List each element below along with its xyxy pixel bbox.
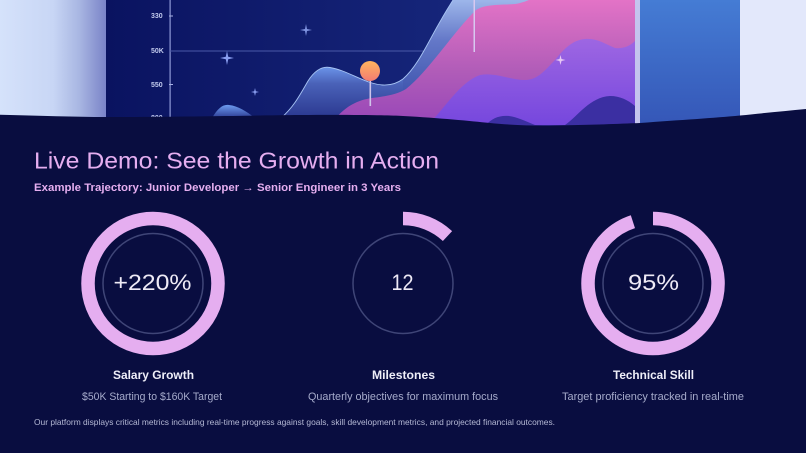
vertical marker line — [474, 0, 475, 52]
description: milestones: Quarterly objectives for maximum focus — [308, 391, 498, 403]
small blue hill — [212, 105, 255, 118]
pink area — [336, 0, 635, 130]
label: technical skill: Technical Skill — [613, 368, 694, 382]
metric: milestones — [308, 218, 498, 403]
left light background — [0, 0, 106, 130]
label: milestones: Milestones — [372, 368, 435, 382]
chart axis: 330 — [151, 13, 163, 20]
ring: +220% — [88, 218, 218, 348]
chart axis: 50K — [151, 48, 164, 55]
panel edge strip — [635, 0, 640, 130]
metric: technical skill — [562, 218, 744, 403]
ring: 12 — [353, 218, 453, 334]
large blue hill, left part — [281, 67, 420, 118]
value: 12: 12 — [392, 270, 414, 295]
chart panel — [106, 0, 635, 130]
right light background — [740, 0, 806, 130]
ring: 95% — [588, 218, 718, 348]
title: Live Demo: See the Growth in Action — [34, 148, 439, 174]
label: salary growth: Salary Growth — [113, 368, 194, 382]
footer note: Our platform displays critical metrics including real-time progress against goals, skill development metrics, and projected financial outcomes. — [34, 417, 555, 427]
blue side panel — [640, 0, 740, 130]
milestone pin — [360, 61, 380, 106]
large blue hill, right part — [403, 0, 530, 118]
sparkle on purple area — [556, 55, 566, 65]
value: 95%: 95% — [628, 270, 679, 295]
purple area — [428, 39, 635, 130]
chart axis: 800 — [151, 115, 163, 122]
metric: salary growth — [82, 218, 222, 403]
star sparkles — [220, 24, 312, 96]
header illustration: growth chart — [0, 0, 806, 130]
dark wave background — [0, 109, 806, 453]
chart axis — [151, 0, 470, 122]
description: technical skill: Target proficiency tracked in real-time — [562, 391, 744, 403]
hill outline — [281, 0, 453, 118]
chart axis: 550 — [151, 82, 163, 89]
value: +220%: +220% — [114, 270, 192, 295]
subtitle: Example Trajectory: Junior Developer → Senior Engineer in 3 Years — [34, 182, 401, 194]
description: salary growth: $50K Starting to $160K Target — [82, 391, 222, 403]
dark purple waves — [486, 96, 635, 130]
